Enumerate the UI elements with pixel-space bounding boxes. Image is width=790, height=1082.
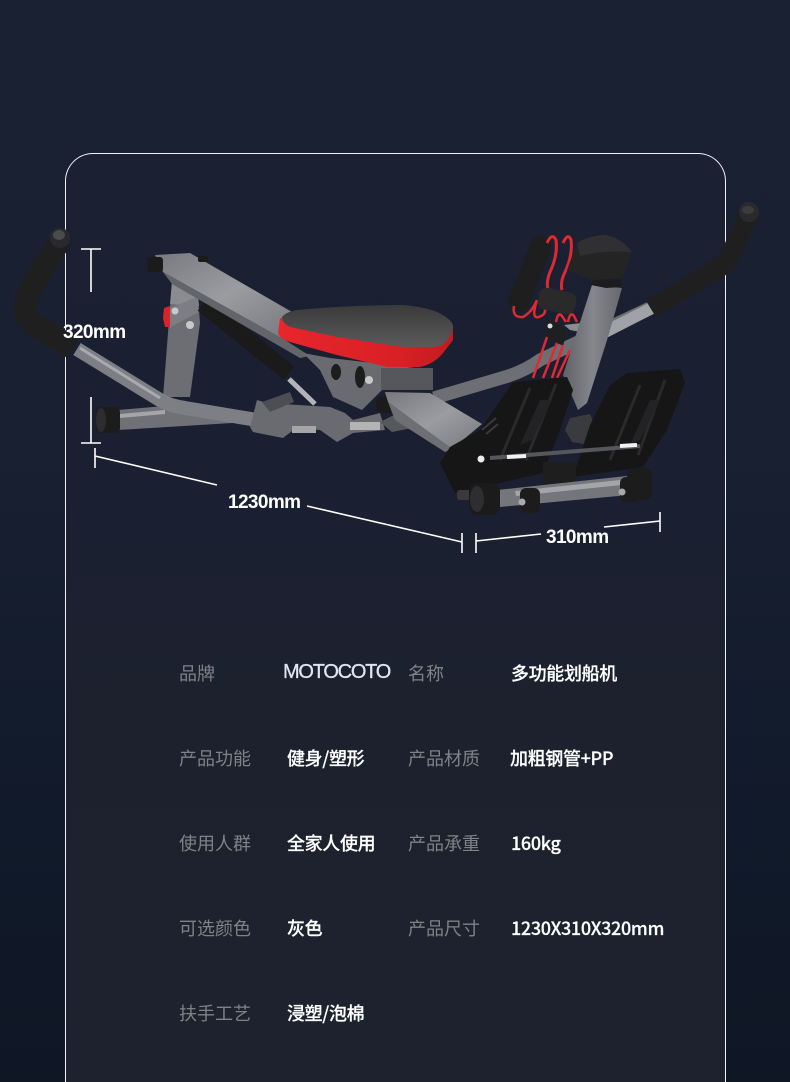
resistance bands and foam roller [514,237,590,378]
gas shock absorber [203,304,315,404]
right foot pedal [573,369,685,477]
pivot bracket and springs [250,392,412,442]
seat carriage [303,353,433,410]
spec row: brand value: MOTOCOTO [283,661,390,683]
dimension: height 320mm [63,249,126,443]
right handlebar [434,202,759,398]
seat cushion [278,305,453,367]
dimension: width 310mm: 310mm [546,527,608,548]
dimension: height 320mm: 320mm [63,322,126,343]
dimension: length 1230mm: 1230mm [228,492,300,513]
panel: specification card [65,153,726,1082]
spec row: size label: 产品尺寸 [408,915,480,941]
spec row: load value: 160kg [511,830,561,856]
dimension: length 1230mm [95,448,462,553]
spec row: material value: 加粗钢管+PP [510,745,613,771]
spec row: material label: 产品材质 [408,745,480,771]
spec row: users value: 全家人使用 [287,830,375,856]
dimension: width 310mm [476,512,660,553]
spec row: handle label: 扶手工艺 [179,1000,251,1026]
seat rail rear section [147,253,310,358]
spec row: function label: 产品功能 [179,745,251,771]
front support leg [163,282,200,397]
spec row: size value: 1230X310X320mm [511,915,664,941]
spec row: name label: 名称 [408,660,444,686]
spec row: handle value: 浸塑/泡棉 [287,1000,364,1026]
pedal axle [490,445,640,484]
spec row: users label: 使用人群 [179,830,251,856]
seat rail front section [385,392,482,452]
front roller bar [457,468,652,515]
left handlebar [25,228,257,433]
spec row: brand label: 品牌 [179,660,215,686]
spec row: load label: 产品承重 [408,830,480,856]
spec row: name value: 多功能划船机 [511,660,617,686]
spec row: colour value: 灰色 [287,915,322,941]
spec row: colour label: 可选颜色 [179,915,251,941]
foot pedal post and pad [563,235,632,445]
left foot pedal [440,377,573,493]
spec row: function value: 健身/塑形 [287,745,364,771]
